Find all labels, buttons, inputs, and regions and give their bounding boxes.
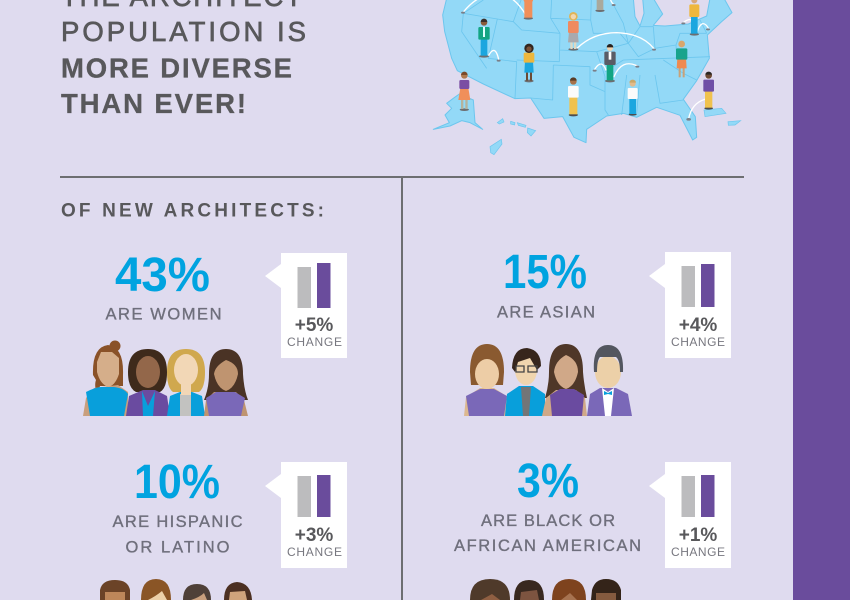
- stat: Hispanic or Latino: OR LATINO: [126, 538, 230, 556]
- map: contiguous states: [443, 0, 732, 143]
- person: green jacket, blue trousers: [478, 19, 490, 58]
- map: state borders: [462, 0, 710, 115]
- purple side band: [793, 0, 850, 600]
- title: POPULATION IS: [61, 16, 306, 47]
- callout: Hispanic change: CHANGE: [287, 545, 342, 559]
- title: THAN EVER!: [61, 88, 246, 119]
- callout: Asian change: CHANGE: [671, 335, 725, 349]
- stat: women: 43%: [115, 249, 210, 302]
- woman with curly hair: [126, 349, 170, 416]
- person: purple top, yellow trousers: [703, 72, 714, 110]
- illustration: four women: [83, 340, 248, 416]
- stat: Hispanic or Latino: 10%: [134, 456, 220, 509]
- stat: Asian: ARE ASIAN: [497, 304, 595, 322]
- horizontal divider: [60, 176, 744, 178]
- woman with bob: [464, 344, 508, 416]
- map of the United States with people: [433, 0, 741, 155]
- map: arc end pads: [461, 4, 710, 121]
- person: purple top, orange skirt: [458, 72, 470, 111]
- person: dark curly hair, yellow top, blue skirt: [524, 44, 534, 82]
- woman: [470, 579, 510, 600]
- stat: Hispanic or Latino: ARE HISPANIC: [112, 513, 243, 531]
- stat: Black or African American: ARE BLACK OR: [481, 512, 615, 530]
- man in suit with bow tie: [587, 345, 632, 416]
- callout: Black change: CHANGE: [671, 545, 725, 559]
- man: [100, 580, 130, 600]
- stat: women: ARE WOMEN: [106, 306, 222, 324]
- person: white top, blue trousers: [628, 80, 638, 116]
- person: gray outfit, top: [595, 0, 605, 12]
- map: Hawaii: [490, 119, 536, 155]
- callout: women change: +5%: [295, 315, 333, 336]
- map: migration arcs: [463, 0, 709, 119]
- section heading: OF NEW ARCHITECTS:: [61, 200, 324, 222]
- illustration: four Black people, cropped: [470, 579, 621, 600]
- man: [514, 580, 544, 600]
- man with glasses: [505, 348, 545, 416]
- woman with bun: [83, 340, 128, 416]
- person: orange outfit, top: [524, 0, 533, 20]
- map: Puerto Rico and Virgin Islands: [704, 108, 741, 125]
- map: Alaska: [433, 94, 483, 129]
- stat: Asian: [497, 246, 595, 322]
- woman with long dark hair and necklace: [542, 344, 587, 416]
- person: blonde, orange top, gray skirt: [568, 12, 579, 51]
- callout: women change: CHANGE: [287, 335, 342, 349]
- person: yellow jacket, blue trousers: [689, 0, 699, 36]
- callout: Hispanic change: [265, 462, 347, 568]
- stat: Asian: 15%: [503, 246, 587, 299]
- stat: Black or African American: AFRICAN AMERICAN: [454, 537, 641, 555]
- vertical divider: [401, 177, 403, 600]
- man with short hair: [224, 582, 252, 600]
- woman with long dark hair: [204, 349, 248, 416]
- woman: [141, 579, 171, 600]
- stat: women: [106, 249, 222, 324]
- title: MORE DIVERSE: [61, 52, 292, 84]
- man with glasses: [591, 579, 621, 600]
- person: white top, yellow trousers: [568, 77, 579, 116]
- callout: Black change: [649, 462, 731, 568]
- callout: Hispanic change: +3%: [295, 525, 333, 546]
- callout: Black change: +1%: [679, 525, 717, 546]
- person: dark jacket, green trousers: [604, 44, 616, 82]
- woman with blonde hair: [167, 349, 205, 416]
- illustration: four Hispanic people, cropped: [100, 579, 252, 600]
- callout: Asian change: [649, 252, 731, 358]
- stat: Black or African American: 3%: [517, 455, 579, 508]
- illustration: four Asian people: [464, 344, 632, 416]
- woman with auburn hair: [552, 579, 586, 600]
- stat: Black or African American: [454, 455, 641, 555]
- callout: women change: [265, 253, 347, 358]
- stat: Hispanic or Latino: [112, 456, 243, 556]
- title: [61, 0, 306, 119]
- woman with dark hair: [183, 584, 211, 600]
- person: teal top, orange skirt: [676, 41, 687, 77]
- callout: Asian change: +4%: [679, 315, 717, 336]
